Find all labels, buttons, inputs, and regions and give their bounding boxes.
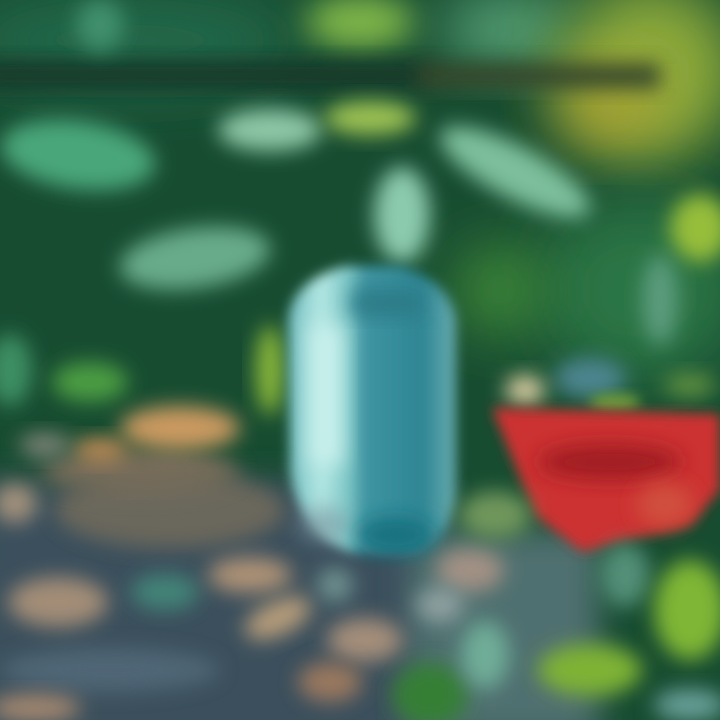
bottle (288, 266, 456, 553)
red pot (492, 358, 720, 552)
foreground leaves bottom right (392, 491, 720, 720)
rocks: tan stones pile (0, 406, 504, 720)
ground: grey-blue rocks base (0, 480, 600, 720)
dark horizontal branch (0, 60, 660, 90)
leaves: pale green foliage (0, 0, 720, 406)
